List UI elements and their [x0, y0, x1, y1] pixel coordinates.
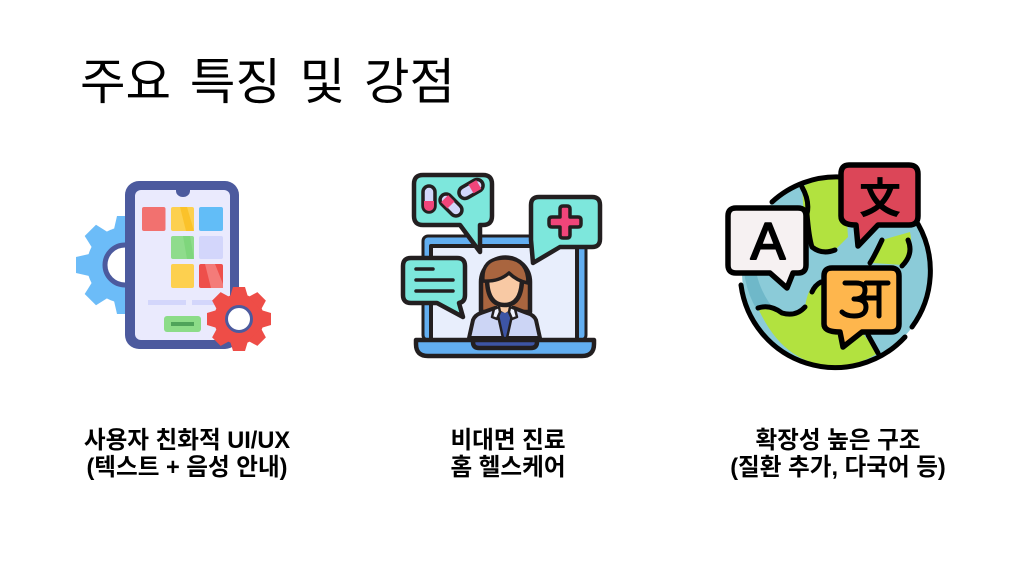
- globe: [741, 177, 930, 368]
- text lines: [148, 300, 186, 305]
- doctor: [469, 258, 540, 338]
- label: user friendly: [84, 428, 290, 481]
- laptop screen: [423, 236, 586, 340]
- label: extensibility: 확장성 높은 구조: [755, 428, 921, 454]
- bubble: orange Devanagari letter: [824, 268, 899, 347]
- label: user friendly: 사용자 친화적 UI/UX: [84, 428, 290, 454]
- icon: smartphone with gears: [76, 181, 271, 351]
- bubble: medical cross: [531, 197, 600, 263]
- bubble: text message: [403, 258, 465, 317]
- bubble: white A: [728, 208, 806, 288]
- green button: [164, 316, 201, 332]
- title: 주요 특징 및 강점: [80, 55, 455, 110]
- label: extensibility: (질환 추가, 다국어 등): [730, 455, 946, 481]
- label: telemedicine: 비대면 진료: [450, 428, 566, 454]
- label: user friendly: (텍스트 + 음성 안내): [86, 455, 288, 481]
- icon: globe with translation bubbles: [728, 165, 930, 368]
- laptop base: [416, 340, 594, 356]
- bubble: red 文: [841, 165, 918, 246]
- label: telemedicine: 홈 헬스케어: [450, 455, 566, 481]
- label: telemedicine: [450, 428, 566, 481]
- phone body: [125, 181, 239, 349]
- label: extensibility: [730, 428, 946, 481]
- glyph: A: A: [751, 213, 786, 271]
- app tiles: [142, 207, 223, 288]
- glyph: 文: 文: [859, 165, 901, 226]
- bubble: medicine: [414, 175, 492, 252]
- red gear: [207, 287, 271, 351]
- blue gear: [76, 216, 163, 314]
- icon: telemedicine doctor on laptop: [403, 175, 600, 356]
